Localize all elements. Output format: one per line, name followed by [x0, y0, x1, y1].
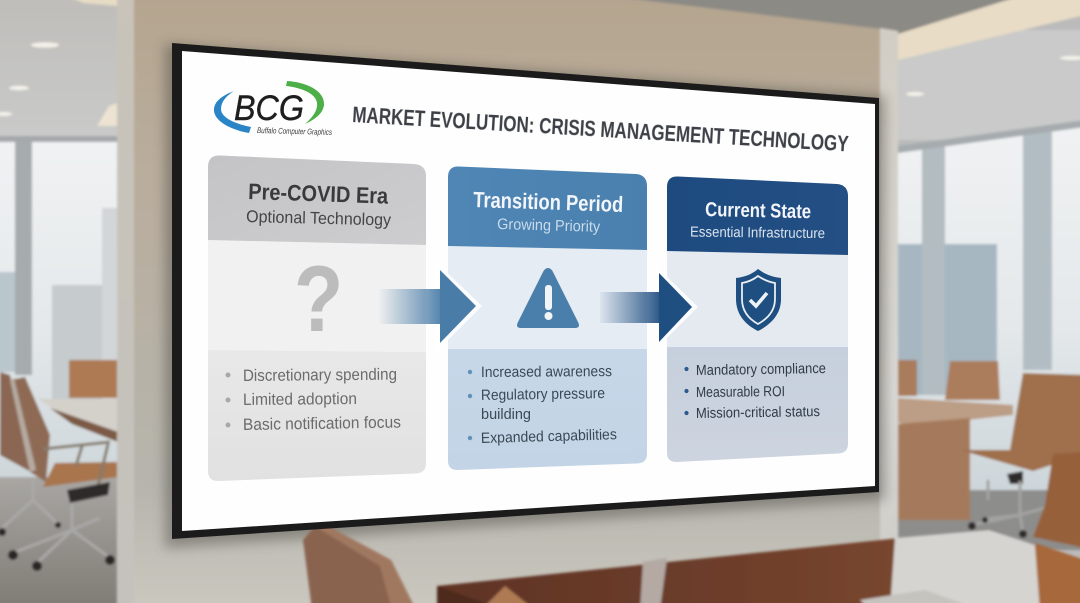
logo wordmark: BCG [234, 89, 304, 128]
foreground table and chair [303, 525, 1080, 603]
card 1 heading: Pre-COVID Era [248, 179, 389, 209]
wall right lit strip [880, 28, 898, 548]
logo: green swoosh [286, 81, 324, 124]
left back chair [69, 360, 118, 398]
card 2 header [448, 166, 647, 250]
card 3 header [667, 176, 848, 255]
right back chairs [898, 360, 917, 396]
title: MARKET EVOLUTION: CRISIS MANAGEMENT TECHNOLOGY [352, 102, 850, 156]
card 3 bullet list [684, 361, 826, 422]
left table [38, 399, 118, 440]
card 3 bullet list: Mandatory compliance [696, 361, 826, 379]
card 1 body [208, 240, 426, 352]
panel: Pre-COVID Era [208, 155, 426, 481]
card 2 body [448, 246, 647, 349]
panel: Transition Period [448, 166, 647, 470]
card 1 header [208, 155, 426, 245]
card 3 list area [667, 347, 848, 462]
card 1 subheading: Optional Technology [246, 207, 392, 230]
right room ceiling [895, 30, 1080, 140]
card 2 bullet list: Regulatory pressure [481, 385, 605, 404]
monitor frame [172, 43, 879, 539]
icon: shield [736, 269, 781, 331]
pillar edge [117, 0, 134, 603]
slide: logo [214, 81, 332, 137]
table side [437, 586, 485, 603]
left room floor [0, 477, 118, 603]
foreground table [437, 530, 1080, 603]
icon: warning triangle [517, 268, 579, 328]
card 2 heading: Transition Period [473, 187, 624, 217]
icon: question mark: ? [294, 246, 343, 351]
right table [898, 398, 1013, 425]
logo tagline: Buffalo Computer Graphics [257, 126, 332, 137]
right ceiling lights [906, 92, 924, 96]
card 2 bullet list: Expanded capabilities [481, 426, 617, 447]
card 2 list area [448, 349, 647, 470]
table reflection [890, 530, 1040, 603]
left windows [0, 140, 120, 485]
wall [133, 0, 898, 603]
logo: blue swoosh [214, 91, 251, 133]
screen [182, 51, 875, 531]
card 2 bullet list [468, 363, 617, 447]
card 3 subheading: Essential Infrastructure [690, 225, 825, 242]
left room ceiling [0, 0, 120, 140]
card 2 bullet list: Increased awareness [481, 363, 612, 381]
right foreground chair [1033, 452, 1080, 548]
card 2 subheading: Growing Priority [497, 216, 601, 236]
right chair [960, 373, 1080, 471]
panel: Current State [667, 176, 848, 462]
foreground chair [303, 525, 416, 603]
card 1 bullet list: Basic notification focus [243, 414, 401, 434]
card 1 bullet list: Discretionary spending [243, 366, 397, 385]
left chairs [0, 372, 31, 472]
arrow: Transition to Current [600, 265, 698, 350]
card 3 bullet list: Measurable ROI [696, 384, 785, 401]
card 3 heading: Current State [705, 199, 811, 223]
card 3 body [667, 251, 848, 347]
screen shadow [165, 44, 885, 548]
right windows [898, 122, 1080, 490]
card 1 bullet list [226, 366, 401, 434]
card 3 bullet list: Mission-critical status [696, 404, 820, 422]
left ceiling lights [0, 0, 118, 126]
card 2 bullet list: building [481, 406, 531, 423]
wall ceiling band and cove light [600, 0, 1040, 34]
right floor [898, 490, 1080, 550]
card 1 bullet list: Limited adoption [243, 390, 357, 409]
card 1 list area [208, 350, 426, 481]
table inset [860, 590, 980, 603]
arrow: Pre-COVID to Transition [378, 262, 482, 352]
